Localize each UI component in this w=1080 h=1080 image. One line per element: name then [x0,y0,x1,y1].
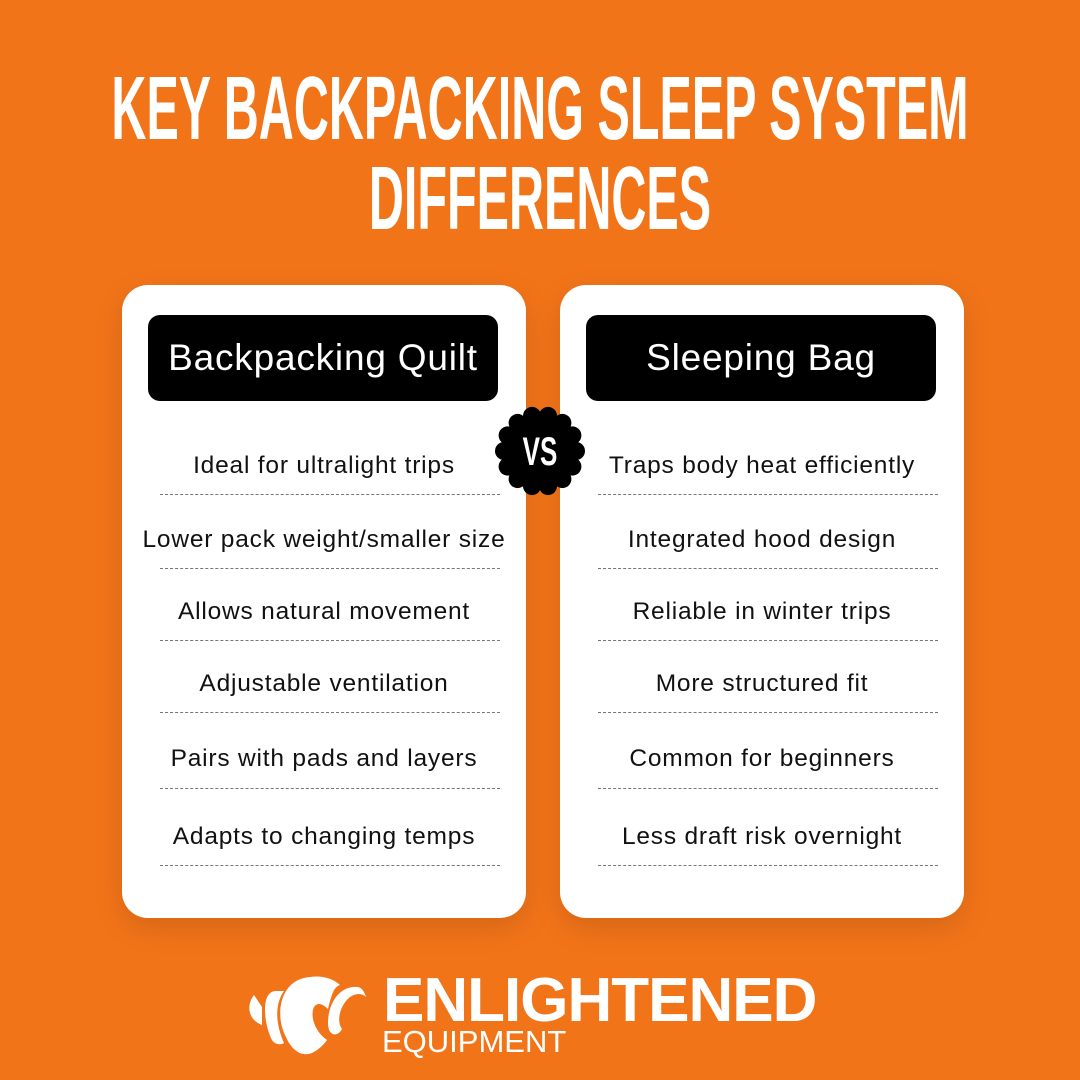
panel: sleeping bag: Common for beginners [629,745,895,772]
panel: backpacking quilt [122,285,526,918]
title [111,59,969,249]
heading: backpacking quilt: Backpacking Quilt [168,337,478,378]
logo subtext: EQUIPMENT [382,1024,566,1059]
panel: sleeping bag [560,285,964,918]
icon: vs badge: VS [523,429,557,474]
panel: backpacking quilt: Ideal for ultralight trips [193,452,455,479]
panel: sleeping bag: Reliable in winter trips [633,598,891,625]
list: sleeping bag items [598,452,938,866]
panel: backpacking quilt: Adapts to changing temps [173,823,475,850]
icon: logo mark [249,976,366,1054]
list: quilt items [142,452,506,866]
panel: sleeping bag: Traps body heat efficiently [609,452,915,479]
logo [249,966,816,1059]
panel: backpacking quilt: Lower pack weight/smaller size [142,526,506,553]
title: DIFFERENCES [369,149,711,249]
heading: sleeping bag: Sleeping Bag [646,337,876,378]
panel: backpacking quilt: Pairs with pads and layers [171,745,477,772]
panel: backpacking quilt: Adjustable ventilation [199,670,449,697]
panel: sleeping bag: More structured fit [656,670,868,697]
icon: vs badge [495,406,585,496]
title: KEY BACKPACKING SLEEP SYSTEM [111,59,969,159]
heading: backpacking quilt [148,315,498,401]
heading: sleeping bag [586,315,936,401]
logo text: ENLIGHTENED [383,966,816,1035]
panel: sleeping bag: Less draft risk overnight [622,823,902,850]
panel: sleeping bag: Integrated hood design [628,526,896,553]
panel: backpacking quilt: Allows natural movement [178,598,470,625]
